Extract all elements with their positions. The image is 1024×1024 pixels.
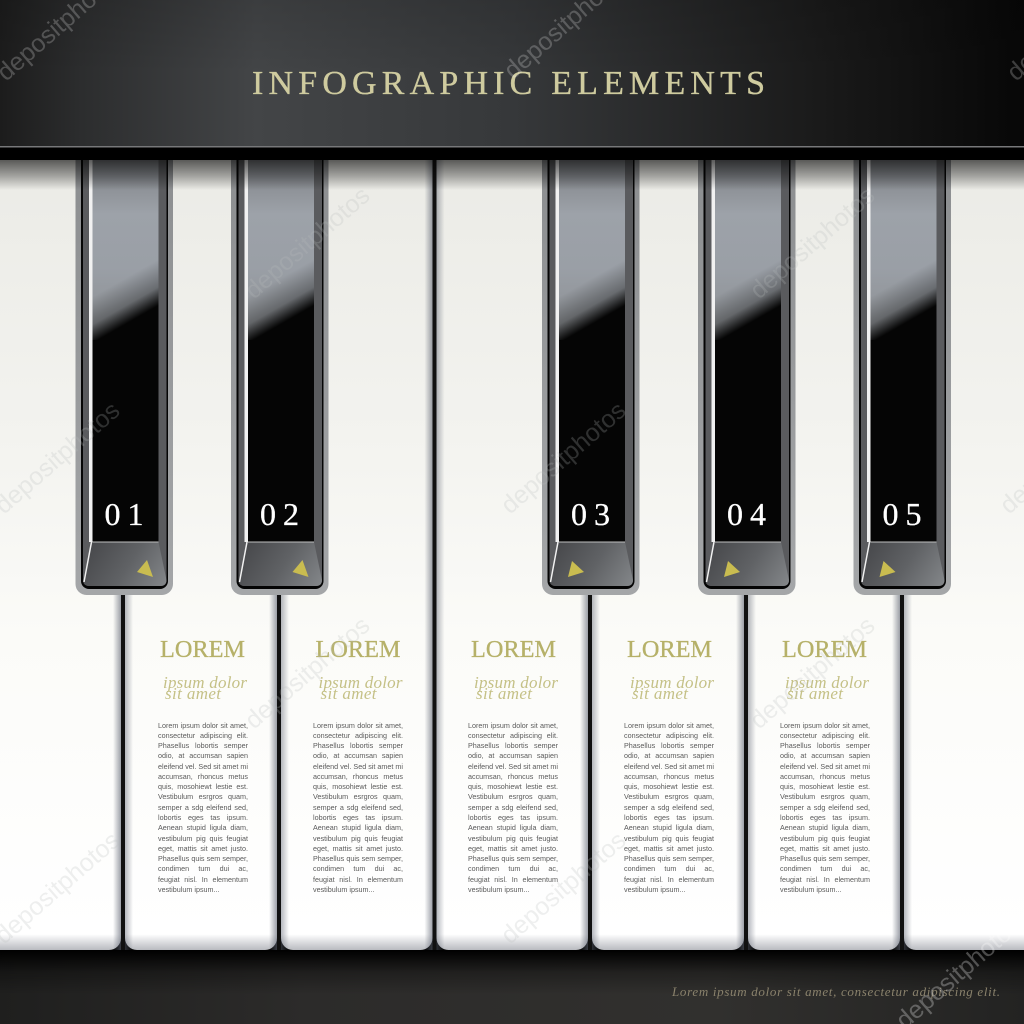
column 2 body text: lobortis eges tas ipsum. xyxy=(313,813,403,822)
column 2 body text: quis, mosohiewt lestie est. xyxy=(313,782,403,791)
column 3 body text xyxy=(468,720,558,894)
subtitle: ipsum dolor xyxy=(474,673,558,692)
white key 5 xyxy=(592,160,744,950)
subtitle xyxy=(318,673,403,703)
column 2 body text: consectetur adipiscing elit. xyxy=(313,731,403,740)
stock watermarks: depositphotos xyxy=(496,396,631,520)
column 2 body text: Phasellus quis sem semper, xyxy=(313,854,403,863)
column 1 body text: Lorem ipsum dolor sit amet, xyxy=(158,720,248,730)
column 5 body text: vestibulum pig quis feugiat xyxy=(780,834,870,843)
column 2 body text: eget, mattis sit amet justo. xyxy=(313,844,403,853)
column 5 body text: eleifend vel. Sed sit amet mi xyxy=(780,762,870,771)
column 5 heading xyxy=(782,636,869,703)
triangle icon xyxy=(568,561,584,577)
column 5 body text: eget, mattis sit amet justo. xyxy=(780,844,870,853)
column 4 body text: Phasellus quis sem semper, xyxy=(624,854,714,863)
column 5 body text: vestibulum ipsum... xyxy=(780,885,842,894)
column 3 body text: quis, mosohiewt lestie est. xyxy=(468,782,558,791)
column 4 body text: lobortis eges tas ipsum. xyxy=(624,813,714,822)
number: 01 xyxy=(104,496,150,532)
column 1 body text: eleifend vel. Sed sit amet mi xyxy=(158,762,248,771)
number: 05 xyxy=(882,496,928,532)
column 1 heading: LOREM xyxy=(160,636,245,663)
column 4 body text xyxy=(624,720,714,894)
column 3 body text: vestibulum pig quis feugiat xyxy=(468,834,558,843)
column 2 body text xyxy=(313,720,403,894)
triangle icon xyxy=(880,561,896,577)
subtitle: ipsum dolor xyxy=(785,673,869,692)
number: 04 xyxy=(727,496,773,532)
column 3 heading xyxy=(471,636,558,703)
column 1 body text: semper a sdg eleifend sed, xyxy=(158,803,248,812)
column 2 body text: condimen tum dui ac, xyxy=(313,864,403,873)
column 5 body text: accumsan, rhoncus metus xyxy=(780,772,870,781)
title: INFOGRAPHIC ELEMENTS xyxy=(252,65,765,102)
white key 7 xyxy=(904,160,1024,950)
column 1 body text: condimen tum dui ac, xyxy=(158,864,248,873)
stock watermarks: depositphotos xyxy=(240,611,375,735)
column 4 body text: vestibulum pig quis feugiat xyxy=(624,834,714,843)
footer band xyxy=(0,950,1024,1024)
column 1 body text: feugiat nisl. In elementum xyxy=(158,875,248,884)
black key 05 xyxy=(854,150,951,595)
column 5 body text: lobortis eges tas ipsum. xyxy=(780,813,870,822)
number: 02 xyxy=(260,496,306,532)
column 3 body text: accumsan, rhoncus metus xyxy=(468,772,558,781)
stock watermarks: depositphotos xyxy=(496,826,631,950)
subtitle xyxy=(630,673,714,703)
subtitle: sit amet xyxy=(787,684,844,703)
column 4 body text: condimen tum dui ac, xyxy=(624,864,714,873)
column 4 body text: eleifend vel. Sed sit amet mi xyxy=(624,762,714,771)
column 3 body text: vestibulum ipsum... xyxy=(468,885,530,894)
subtitle: sit amet xyxy=(632,684,689,703)
column 1 body text: eget, mattis sit amet justo. xyxy=(158,844,248,853)
column 1 body text: quis, mosohiewt lestie est. xyxy=(158,782,248,791)
column 1 body text: Vestibulum esrgros quam, xyxy=(158,792,248,801)
column 1 body text: vestibulum pig quis feugiat xyxy=(158,834,248,843)
column 3 body text: condimen tum dui ac, xyxy=(468,864,558,873)
column 1 body text: accumsan, rhoncus metus xyxy=(158,772,248,781)
column 1 body text: Aenean stupid ligula diam, xyxy=(158,823,248,832)
column 2 body text: feugiat nisl. In elementum xyxy=(313,875,403,884)
column 4 body text: Vestibulum esrgros quam, xyxy=(624,792,714,801)
triangle icon xyxy=(137,560,153,577)
key separators xyxy=(113,160,912,950)
column 4 body text: Lorem ipsum dolor sit amet, xyxy=(624,720,714,730)
column 2 body text: eleifend vel. Sed sit amet mi xyxy=(313,762,403,771)
column 5 body text: consectetur adipiscing elit. xyxy=(780,731,870,740)
stock watermarks: depositphotos xyxy=(240,181,375,305)
column 3 body text: Aenean stupid ligula diam, xyxy=(468,823,558,832)
column 1 body text xyxy=(158,720,248,894)
column 4 body text: quis, mosohiewt lestie est. xyxy=(624,782,714,791)
black key 02 xyxy=(231,150,328,595)
column 4 body text: odio, at accumsan sapien xyxy=(624,751,714,760)
column 3 body text: semper a sdg eleifend sed, xyxy=(468,803,558,812)
column 4 heading: LOREM xyxy=(627,636,712,663)
column 4 body text: Aenean stupid ligula diam, xyxy=(624,823,714,832)
piano keyboard base xyxy=(0,148,1024,960)
column 5 body text: quis, mosohiewt lestie est. xyxy=(780,782,870,791)
column 5 body text: condimen tum dui ac, xyxy=(780,864,870,873)
number: 03 xyxy=(571,496,617,532)
column 1 heading xyxy=(160,636,247,703)
column 1 body text: lobortis eges tas ipsum. xyxy=(158,813,248,822)
column 3 body text: Phasellus lobortis semper xyxy=(468,741,558,750)
column 5 body text: Aenean stupid ligula diam, xyxy=(780,823,870,832)
column 1 body text: Phasellus quis sem semper, xyxy=(158,854,248,863)
white key 2 xyxy=(125,160,277,950)
column 3 body text: feugiat nisl. In elementum xyxy=(468,875,558,884)
header band xyxy=(0,0,1024,160)
column 4 heading xyxy=(627,636,714,703)
column 1 body text: vestibulum ipsum... xyxy=(158,885,220,894)
column 3 body text: odio, at accumsan sapien xyxy=(468,751,558,760)
column 5 body text: Vestibulum esrgros quam, xyxy=(780,792,870,801)
column 5 body text: Lorem ipsum dolor sit amet, xyxy=(780,720,870,730)
stock watermarks: depositphotos xyxy=(745,181,880,305)
white key 1 xyxy=(0,160,121,950)
stock watermarks: depositphotos xyxy=(745,611,880,735)
subtitle: ipsum dolor xyxy=(163,673,247,692)
column 5 heading: LOREM xyxy=(782,636,867,663)
column 3 body text: consectetur adipiscing elit. xyxy=(468,731,558,740)
column 1 body text: consectetur adipiscing elit. xyxy=(158,731,248,740)
subtitle: ipsum dolor xyxy=(318,673,403,692)
column 2 body text: odio, at accumsan sapien xyxy=(313,751,403,760)
column 4 body text: eget, mattis sit amet justo. xyxy=(624,844,714,853)
column 3 body text: eleifend vel. Sed sit amet mi xyxy=(468,762,558,771)
white key 3 xyxy=(281,160,432,950)
subtitle: sit amet xyxy=(320,684,378,703)
column 2 body text: vestibulum pig quis feugiat xyxy=(313,834,403,843)
column 5 body text: feugiat nisl. In elementum xyxy=(780,875,870,884)
black key 04 xyxy=(698,150,796,595)
column 4 body text: Phasellus lobortis semper xyxy=(624,741,714,750)
column 2 body text: Vestibulum esrgros quam, xyxy=(313,792,403,801)
white key 4 xyxy=(436,160,588,950)
black key 01 xyxy=(76,150,173,595)
subtitle xyxy=(163,673,247,703)
column 5 body text: semper a sdg eleifend sed, xyxy=(780,803,870,812)
column 3 body text: eget, mattis sit amet justo. xyxy=(468,844,558,853)
white key 6 xyxy=(748,160,900,950)
column 2 body text: semper a sdg eleifend sed, xyxy=(313,803,403,812)
column 2 body text: accumsan, rhoncus metus xyxy=(313,772,403,781)
column 2 body text: Phasellus lobortis semper xyxy=(313,741,403,750)
column 2 body text: vestibulum ipsum... xyxy=(313,885,375,894)
column 4 body text: accumsan, rhoncus metus xyxy=(624,772,714,781)
subtitle xyxy=(474,673,558,703)
subtitle: ipsum dolor xyxy=(630,673,714,692)
column 1 body text: Phasellus lobortis semper xyxy=(158,741,248,750)
column 5 body text: Phasellus lobortis semper xyxy=(780,741,870,750)
column 5 body text: Phasellus quis sem semper, xyxy=(780,854,870,863)
column 4 body text: vestibulum ipsum... xyxy=(624,885,686,894)
column 3 body text: lobortis eges tas ipsum. xyxy=(468,813,558,822)
triangle icon xyxy=(292,560,308,577)
column 3 body text: Phasellus quis sem semper, xyxy=(468,854,558,863)
column 3 body text: Vestibulum esrgros quam, xyxy=(468,792,558,801)
footer caption: Lorem ipsum dolor sit amet, consectetur adipiscing elit. xyxy=(671,984,1000,999)
triangle icon xyxy=(724,561,740,577)
column 4 body text: consectetur adipiscing elit. xyxy=(624,731,714,740)
shadow cast by the header across the keys xyxy=(0,160,1024,190)
column 1 body text: odio, at accumsan sapien xyxy=(158,751,248,760)
column 5 body text xyxy=(780,720,870,894)
column 3 body text: Lorem ipsum dolor sit amet, xyxy=(468,720,558,730)
column 2 body text: Aenean stupid ligula diam, xyxy=(313,823,403,832)
subtitle: sit amet xyxy=(476,684,533,703)
column 2 heading: LOREM xyxy=(316,636,400,663)
subtitle: sit amet xyxy=(165,684,222,703)
black key 03 xyxy=(542,150,640,595)
column 3 heading: LOREM xyxy=(471,636,556,663)
column 4 body text: feugiat nisl. In elementum xyxy=(624,875,714,884)
column 2 heading xyxy=(316,636,403,703)
column 5 body text: odio, at accumsan sapien xyxy=(780,751,870,760)
subtitle xyxy=(785,673,869,703)
column 4 body text: semper a sdg eleifend sed, xyxy=(624,803,714,812)
column 2 body text: Lorem ipsum dolor sit amet, xyxy=(313,720,403,730)
